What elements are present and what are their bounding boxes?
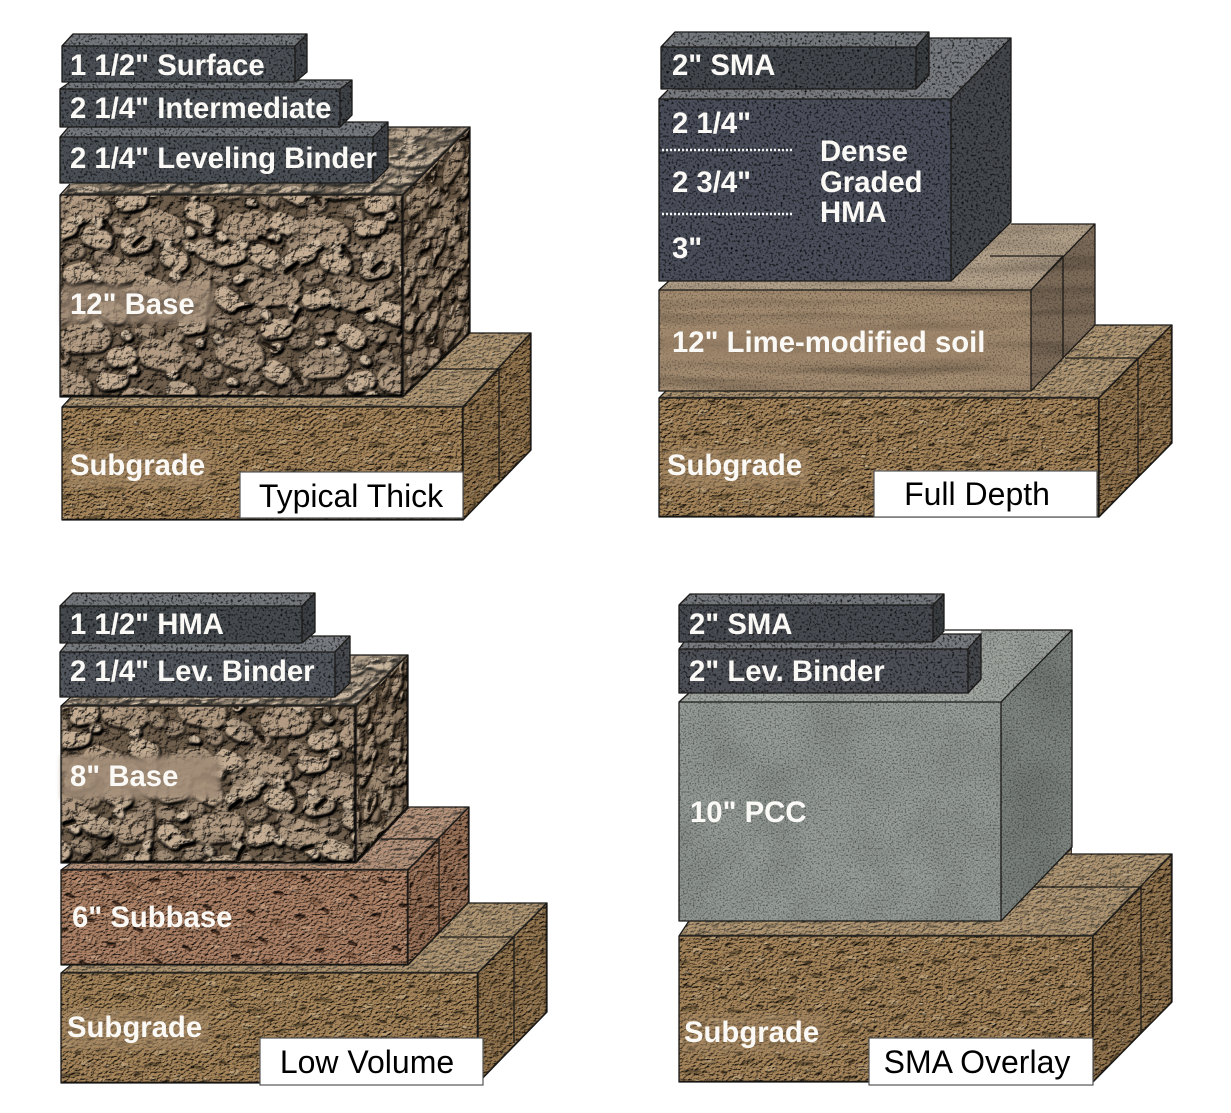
label: 12 inch base: 12" Base bbox=[70, 288, 195, 321]
layer: 8 inch base bbox=[61, 655, 408, 863]
label: Dense Graded HMA bbox=[820, 135, 923, 229]
layer: leveling binder bbox=[679, 634, 981, 693]
label: surface: 1 1/2" Surface bbox=[70, 49, 265, 82]
panel: Typical Thick pavement bbox=[60, 34, 531, 520]
label: 8 inch base: 8" Base bbox=[70, 760, 178, 793]
label: subgrade: Subgrade bbox=[67, 1011, 202, 1044]
caption: Full Depth bbox=[874, 471, 1097, 517]
label: subgrade: Subgrade bbox=[684, 1016, 819, 1049]
layer: intermediate bbox=[60, 80, 352, 127]
label: leveling binder: 2" Lev. Binder bbox=[689, 655, 885, 688]
layer: lime-modified soil bbox=[659, 222, 1095, 391]
label: Dense Graded HMA: Graded bbox=[820, 166, 923, 199]
label: leveling binder: 2 1/4" Lev. Binder bbox=[70, 655, 315, 688]
layer: leveling binder bbox=[60, 122, 388, 183]
panel: SMA Overlay pavement bbox=[679, 594, 1172, 1085]
label: 2 inch SMA: 2" SMA bbox=[672, 49, 775, 82]
divider: dotted lower bbox=[662, 213, 794, 215]
caption: SMA Overlay bbox=[869, 1038, 1093, 1085]
label: 2 1/4 lift: 2 1/4" bbox=[672, 107, 751, 140]
layer: 2 inch SMA bbox=[661, 32, 929, 89]
divider: dotted upper bbox=[662, 149, 794, 151]
label: subgrade: Subgrade bbox=[70, 449, 205, 482]
layer: HMA bbox=[60, 593, 315, 643]
label: 2 inch SMA: 2" SMA bbox=[689, 608, 792, 641]
layer: 10 inch PCC bbox=[679, 630, 1072, 921]
label: subgrade: Subgrade bbox=[667, 449, 802, 482]
caption: Low Volume bbox=[260, 1038, 483, 1085]
layer: 2 inch SMA bbox=[679, 594, 944, 642]
caption: Typical Thick bbox=[240, 472, 463, 518]
panel: Full Depth pavement bbox=[659, 32, 1172, 517]
layer: subgrade bbox=[62, 333, 531, 520]
label: 3 lift: 3" bbox=[672, 232, 702, 265]
label: intermediate: 2 1/4" Intermediate bbox=[70, 92, 331, 125]
layer: leveling binder bbox=[60, 636, 350, 697]
layer: subgrade bbox=[659, 325, 1172, 517]
layer: subgrade bbox=[61, 902, 547, 1083]
panel: Low Volume pavement bbox=[60, 593, 547, 1085]
label: 6 inch subbase: 6" Subbase bbox=[72, 901, 232, 934]
label: Dense Graded HMA: HMA bbox=[820, 196, 887, 229]
layer: 6 inch subbase bbox=[61, 806, 469, 965]
caption: SMA Overlay: SMA Overlay bbox=[884, 1044, 1070, 1080]
layer: 12 inch base bbox=[60, 127, 470, 397]
caption: Full Depth: Full Depth bbox=[904, 476, 1050, 512]
caption: Low Volume: Low Volume bbox=[280, 1044, 454, 1080]
label: 10 inch PCC: 10" PCC bbox=[690, 796, 806, 829]
layer: surface bbox=[62, 34, 307, 82]
layer: subgrade bbox=[679, 845, 1172, 1082]
label: HMA: 1 1/2" HMA bbox=[70, 608, 224, 641]
label: 2 3/4 lift: 2 3/4" bbox=[672, 166, 751, 199]
label: lime-modified soil: 12" Lime-modified soil bbox=[672, 326, 985, 359]
label: Dense Graded HMA: Dense bbox=[820, 135, 908, 168]
layer: dense graded HMA bbox=[659, 38, 1011, 281]
label: leveling binder: 2 1/4" Leveling Binder bbox=[70, 142, 377, 175]
caption: Typical Thick: Typical Thick bbox=[259, 478, 444, 514]
